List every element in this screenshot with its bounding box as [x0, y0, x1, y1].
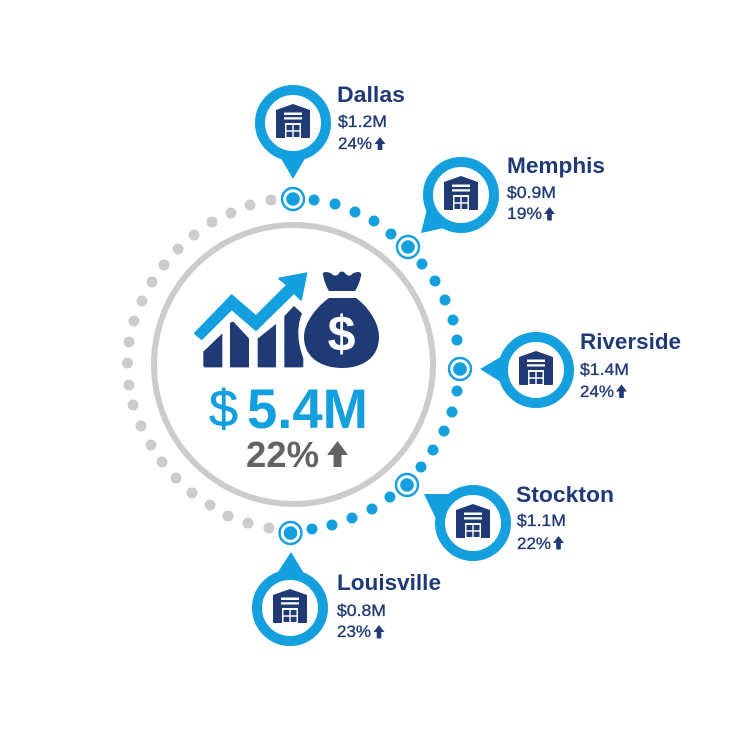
- pin: Stockton: [424, 490, 506, 556]
- label: Stockton: [516, 482, 614, 553]
- label: Memphis: 19%: [507, 204, 542, 223]
- ring markers at each city: [280, 188, 471, 544]
- label: Louisville: Louisville: [337, 570, 441, 595]
- total revenue: $: [209, 380, 238, 438]
- dotted progress ring: blue portion: [306, 194, 462, 534]
- label: Riverside: $1.4M: [580, 360, 629, 379]
- central grey ring: [154, 225, 433, 504]
- label: Dallas: [337, 82, 405, 153]
- label: Louisville: [337, 570, 441, 641]
- label: Riverside: Riverside: [580, 329, 681, 354]
- label: Riverside: 24%: [580, 382, 614, 401]
- icon: money bag: [304, 272, 379, 368]
- label: Dallas: Dallas: [337, 82, 405, 107]
- label: Memphis: Memphis: [507, 153, 605, 178]
- total revenue: 5.4M: [247, 377, 368, 440]
- icon: warehouse: [444, 176, 478, 210]
- label: Stockton: 22%: [517, 534, 551, 553]
- pin: Memphis: [421, 162, 494, 233]
- label: Dallas: $1.2M: [338, 112, 387, 131]
- label: Stockton: $1.1M: [517, 511, 566, 530]
- label: Memphis: [507, 153, 605, 223]
- icon: warehouse: [456, 504, 490, 538]
- pin: Louisville: [257, 552, 323, 641]
- icon: warehouse: [276, 104, 310, 138]
- pin: Riverside: [480, 337, 569, 403]
- icon: growth chart with rising arrow: [195, 273, 306, 367]
- label: Memphis: $0.9M: [507, 183, 556, 202]
- dotted progress ring: grey portion: [122, 194, 276, 534]
- pin: Dallas: [260, 90, 326, 179]
- label: Louisville: $0.8M: [337, 601, 386, 620]
- total growth: 22%: [246, 434, 319, 475]
- label: Stockton: Stockton: [516, 482, 614, 507]
- label: Dallas: 24%: [338, 134, 372, 153]
- label: Riverside: [580, 329, 681, 401]
- icon: warehouse: [519, 351, 553, 385]
- dollar sign on bag: $: [328, 306, 356, 362]
- icon: warehouse: [273, 589, 307, 623]
- label: Louisville: 23%: [337, 622, 371, 641]
